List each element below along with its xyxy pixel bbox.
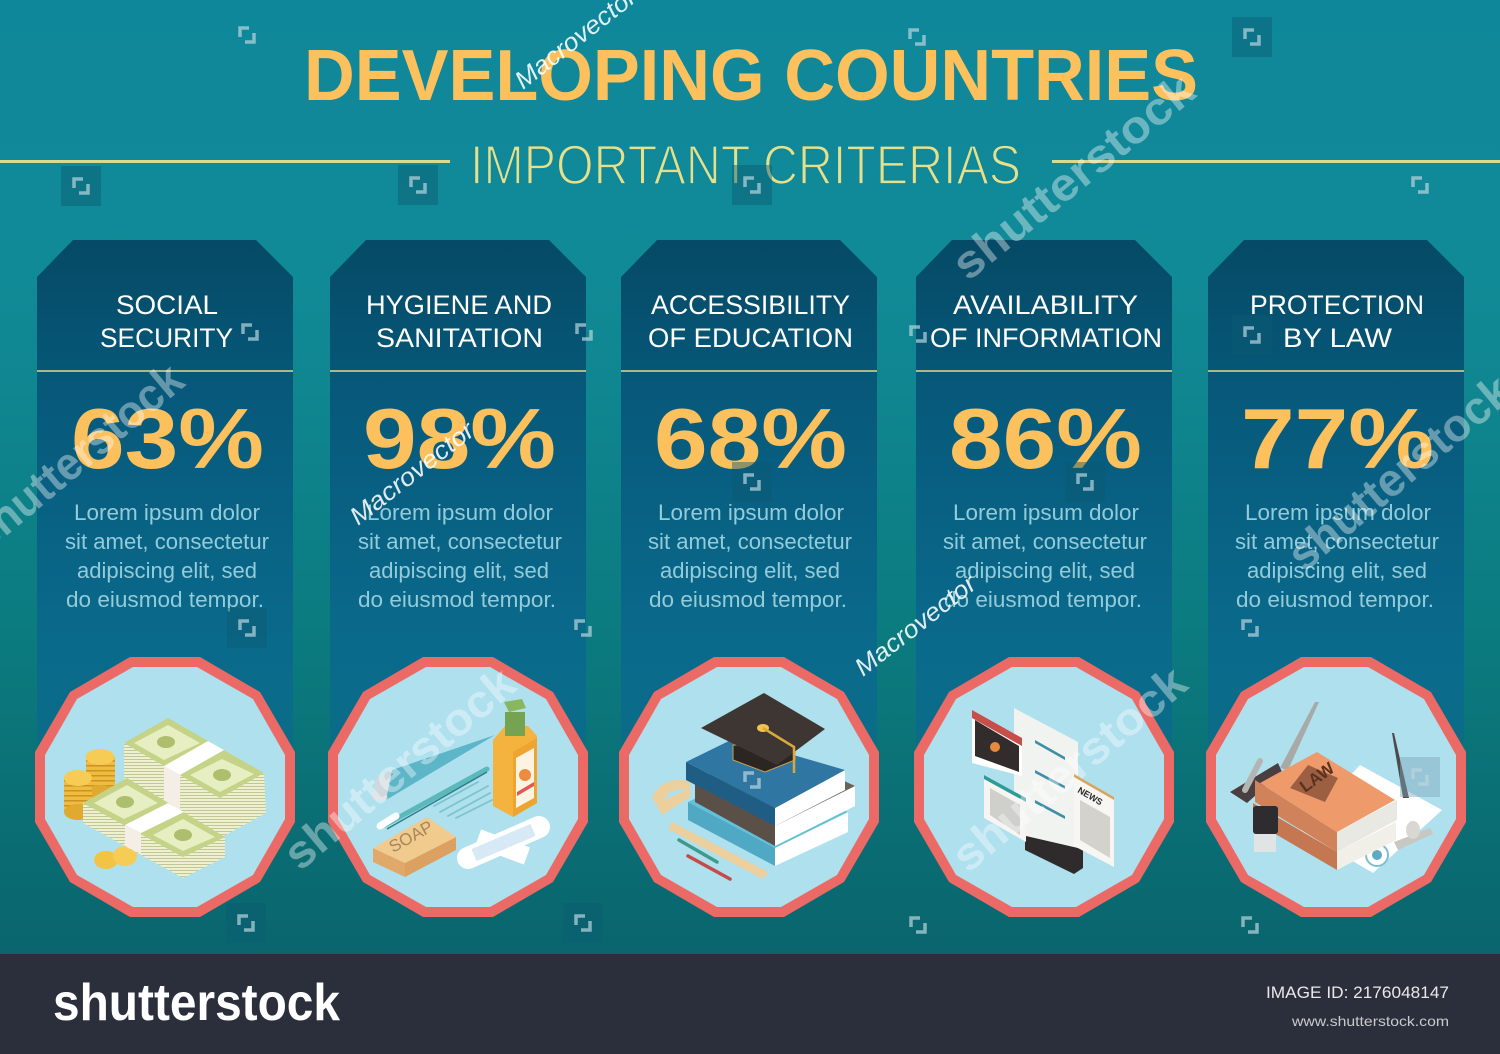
- panel: hygiene and sanitation: [330, 240, 586, 800]
- body text: Lorem ipsum dolor: [367, 500, 553, 525]
- watermark logos: shutterstock: [942, 63, 1205, 290]
- website: www.shutterstock.com: [1291, 1013, 1449, 1029]
- title: DEVELOPING COUNTRIES: [304, 36, 1198, 116]
- body text: do eiusmod tempor.: [66, 587, 264, 612]
- icon: protractor: [652, 780, 690, 815]
- footer bar: [0, 954, 1500, 1054]
- body text: [943, 500, 1147, 612]
- badge: law: [1206, 657, 1466, 917]
- body text: Lorem ipsum dolor: [953, 500, 1139, 525]
- icon: soap bar: SOAP: [386, 817, 436, 856]
- heading: protection by law: [1250, 290, 1424, 353]
- body text: [65, 500, 269, 612]
- heading: hygiene and sanitation: [366, 290, 552, 353]
- icon: adhesive bandage: [468, 827, 539, 858]
- body text: adipiscing elit, sed: [955, 558, 1135, 583]
- icon: graduation cap: [701, 693, 825, 773]
- heading: accessibility of education: OF EDUCATION: [648, 323, 853, 353]
- percentage 77: 77%: [1241, 392, 1434, 487]
- heading: protection by law: PROTECTION: [1250, 290, 1424, 320]
- percentage 63: 63%: [71, 392, 264, 487]
- badge: hygiene: [328, 657, 588, 917]
- watermark logos: shutterstock: [273, 656, 525, 880]
- heading: protection by law: BY LAW: [1283, 323, 1393, 353]
- body text: do eiusmod tempor.: [1236, 587, 1434, 612]
- percentage 98: 98%: [363, 392, 556, 487]
- icon: sunscreen bottle: [493, 699, 537, 817]
- body text: sit amet, consectetur: [65, 529, 269, 554]
- heading: availability of information: AVAILABILITY: [953, 290, 1138, 320]
- body text: Lorem ipsum dolor: [658, 500, 844, 525]
- icon: scrolling page: [1014, 708, 1078, 848]
- panel: accessibility of education: [621, 240, 877, 800]
- body text: do eiusmod tempor.: [944, 587, 1142, 612]
- body text: sit amet, consectetur: [648, 529, 852, 554]
- icon: article document: [984, 775, 1026, 842]
- body text: Lorem ipsum dolor: [74, 500, 260, 525]
- icon: coins: [64, 749, 137, 869]
- percentage 86: 86%: [949, 392, 1142, 487]
- body text: do eiusmod tempor.: [649, 587, 847, 612]
- badge: education: [619, 657, 879, 917]
- icon: law books: LAW: [1296, 758, 1339, 796]
- icon: fountain pen: [1392, 733, 1409, 798]
- icon: pens: [679, 840, 730, 879]
- icon: stamp: [1253, 806, 1278, 852]
- footer logo: shutterstock: [53, 974, 340, 1032]
- body text: [1235, 500, 1439, 612]
- body text: adipiscing elit, sed: [1247, 558, 1427, 583]
- panel: social security: [37, 240, 293, 800]
- subtitle with rules: IMPORTANT CRITERIAS: [470, 133, 1021, 196]
- icon: video window: [972, 710, 1022, 776]
- watermark logos: Macrovector: [849, 569, 983, 682]
- panel: availability of information: [916, 240, 1172, 800]
- heading: hygiene and sanitation: SANITATION: [376, 323, 543, 353]
- icon: front cash bundle: [83, 778, 225, 878]
- heading: accessibility of education: ACCESSIBILITY: [651, 290, 850, 320]
- icon: smartphone base: [1025, 810, 1083, 874]
- heading: availability of information: [930, 290, 1162, 353]
- icon: stacked books: [686, 738, 855, 866]
- icon: back cash bundle: [124, 718, 266, 838]
- heading: social security: SECURITY: [100, 323, 233, 353]
- icon: toothbrush: [380, 769, 487, 829]
- body text: Lorem ipsum dolor: [1245, 500, 1431, 525]
- body text: do eiusmod tempor.: [358, 587, 556, 612]
- badge: information: [914, 657, 1174, 917]
- icon: toothpaste tube: [372, 735, 495, 800]
- heading: social security: [100, 290, 233, 353]
- body text: adipiscing elit, sed: [660, 558, 840, 583]
- body text: sit amet, consectetur: [358, 529, 562, 554]
- icon: news document: NEWS: [1076, 785, 1104, 807]
- heading: social security: SOCIAL: [116, 290, 218, 320]
- heading: hygiene and sanitation: HYGIENE AND: [366, 290, 552, 320]
- heading: availability of information: OF INFORMATION: [930, 323, 1162, 353]
- body text: adipiscing elit, sed: [369, 558, 549, 583]
- body text: sit amet, consectetur: [1235, 529, 1439, 554]
- icon: pen stand: [1230, 702, 1319, 803]
- icon: law books: [1253, 752, 1397, 870]
- watermark logos: shutterstock: [941, 655, 1197, 882]
- icon: soap bar: [373, 817, 456, 877]
- watermark logos: Macrovector: [344, 415, 481, 531]
- icon: news document: [1074, 774, 1114, 867]
- image id: IMAGE ID: 2176048147: [1266, 984, 1449, 1002]
- body text: [648, 500, 852, 612]
- icon: legal paper: [1300, 765, 1442, 873]
- percentage 68: 68%: [654, 392, 847, 487]
- body text: [358, 500, 562, 612]
- badge: money: [35, 657, 295, 917]
- panel: protection by law: [1208, 240, 1464, 800]
- body text: adipiscing elit, sed: [77, 558, 257, 583]
- body text: sit amet, consectetur: [943, 529, 1147, 554]
- heading: accessibility of education: [648, 290, 853, 353]
- subtitle with rules: [0, 133, 1500, 196]
- icon: cotton swabs: [434, 782, 492, 818]
- icon: ruler: [668, 822, 768, 879]
